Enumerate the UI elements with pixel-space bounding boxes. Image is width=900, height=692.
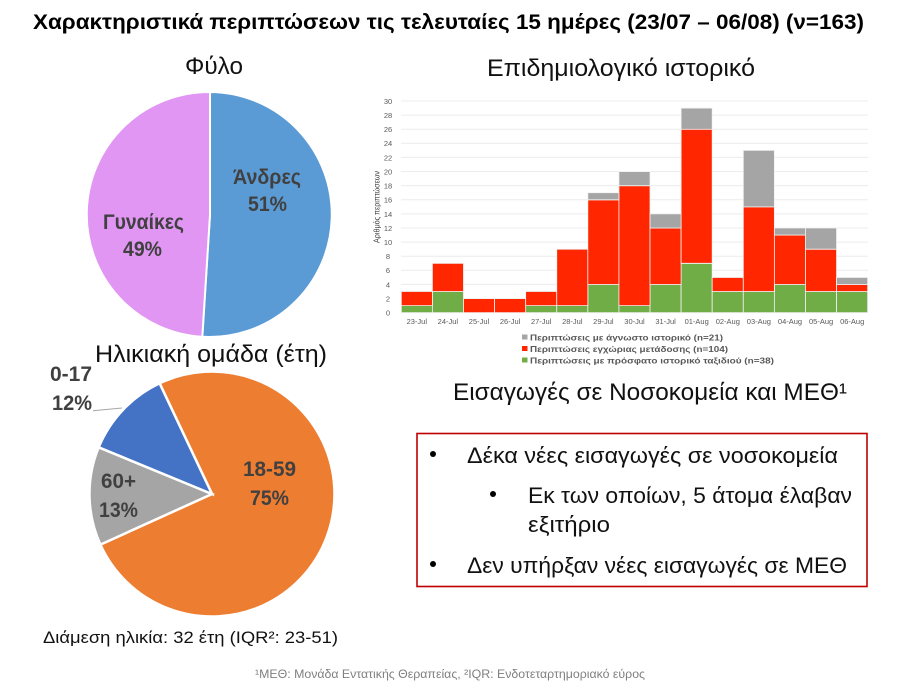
label: men: Άνδρες bbox=[233, 166, 301, 189]
slice: 18-59 bbox=[100, 372, 334, 617]
y axis labels: 4 bbox=[386, 280, 390, 289]
legend: Περιπτώσεις με πρόσφατο ιστορικό ταξιδιού (n=38) bbox=[530, 356, 774, 366]
x axis labels: 30-Jul bbox=[624, 317, 645, 326]
slice: men bbox=[202, 92, 332, 337]
y axis labels: 6 bbox=[386, 266, 390, 275]
label: women: 49% bbox=[123, 238, 162, 261]
label: 0-17: 0-17 bbox=[50, 363, 92, 386]
y axis labels: 22 bbox=[384, 153, 392, 162]
slice: women bbox=[87, 92, 210, 337]
x axis labels: 23-Jul bbox=[407, 317, 427, 326]
y axis labels: 24 bbox=[384, 139, 392, 148]
x axis labels: 05-Aug bbox=[809, 317, 833, 326]
x axis labels: 29-Jul bbox=[593, 317, 614, 326]
slice: 0-17 bbox=[99, 383, 212, 494]
x axis labels: 04-Aug bbox=[778, 317, 802, 326]
y axis labels: 8 bbox=[386, 252, 390, 261]
legend: Περιπτώσεις εγχώριας μετάδοσης (n=104) bbox=[530, 345, 728, 354]
x axis labels: 25-Jul bbox=[469, 317, 490, 326]
sub-bullet: discharged: εξιτήριο bbox=[528, 512, 610, 537]
pie chart: sex bbox=[87, 92, 332, 337]
sub-bullet: discharged bbox=[490, 483, 852, 537]
y axis labels: 14 bbox=[384, 210, 392, 219]
heading: epidemiological history: Επιδημιολογικό ιστορικό bbox=[487, 55, 755, 82]
y axis labels: 30 bbox=[384, 97, 392, 106]
label: 0-17 bbox=[50, 363, 92, 415]
label: 18-59 bbox=[243, 458, 296, 510]
label: 60+: 13% bbox=[99, 499, 138, 522]
y axis labels: 2 bbox=[386, 294, 390, 304]
y axis labels: 0 bbox=[386, 308, 390, 318]
bullet: ICU admissions: Δεν υπήρξαν νέες εισαγωγές σε ΜΕΘ bbox=[467, 553, 847, 578]
x axis labels: 26-Jul bbox=[500, 317, 521, 326]
y axis labels bbox=[384, 97, 392, 318]
x axis labels: 02-Aug bbox=[716, 317, 740, 326]
label: 60+ bbox=[99, 470, 138, 522]
x axis labels: 06-Aug bbox=[840, 317, 864, 326]
heading: admissions: Εισαγωγές σε Νοσοκομεία και ΜΕΘ¹ bbox=[453, 379, 847, 406]
y axis title: Αριθμός περιπτώσεων bbox=[372, 171, 382, 243]
pie chart: age group bbox=[50, 363, 334, 617]
title: Χαρακτηριστικά περιπτώσεων τις τελευταίες 15 ημέρες (23/07 – 06/08) (ν=163) bbox=[33, 11, 864, 34]
y axis labels: 26 bbox=[384, 125, 392, 134]
y axis labels: 18 bbox=[384, 182, 392, 190]
y axis labels: 10 bbox=[384, 238, 392, 247]
label: women: Γυναίκες bbox=[103, 211, 184, 234]
y axis labels: 12 bbox=[384, 224, 392, 233]
bars bbox=[401, 108, 868, 313]
heading: age group: Ηλικιακή ομάδα (έτη) bbox=[95, 341, 327, 368]
bullet: hospital admissions: Δέκα νέες εισαγωγές σε νοσοκομεία bbox=[467, 443, 838, 468]
legend bbox=[522, 334, 774, 366]
label: men bbox=[233, 166, 301, 216]
median age note: Διάμεση ηλικία: 32 έτη (IQR²: 23-51) bbox=[43, 628, 338, 647]
label: women bbox=[103, 211, 184, 261]
sub-bullet: discharged: Εκ των οποίων, 5 άτομα έλαβαν bbox=[528, 483, 852, 508]
x axis labels: 03-Aug bbox=[747, 317, 771, 326]
y axis labels: 16 bbox=[384, 196, 392, 205]
x axis labels: 31-Jul bbox=[655, 317, 676, 326]
leader line bbox=[93, 408, 122, 411]
label: 18-59: 75% bbox=[250, 487, 289, 510]
x axis labels: 28-Jul bbox=[562, 317, 583, 326]
label: 0-17: 12% bbox=[52, 392, 92, 415]
x axis labels: 24-Jul bbox=[438, 317, 458, 326]
heading: sex: Φύλο bbox=[185, 53, 243, 80]
y axis labels: 28 bbox=[384, 111, 392, 120]
footnote: ¹ΜΕΘ: Μονάδα Εντατικής Θεραπείας, ²IQR: Ενδοτεταρτημοριακό εύρος bbox=[255, 667, 645, 681]
x axis labels bbox=[407, 317, 864, 326]
x axis labels: 27-Jul bbox=[531, 317, 552, 326]
y axis labels: 20 bbox=[384, 167, 392, 176]
stacked bar chart bbox=[372, 97, 868, 366]
callout: admissions bbox=[417, 434, 867, 586]
slice: 60+ bbox=[89, 447, 212, 545]
x axis labels: 01-Aug bbox=[685, 317, 709, 326]
label: men: 51% bbox=[248, 193, 287, 216]
label: 60+: 60+ bbox=[101, 470, 136, 493]
legend: Περιπτώσεις με άγνωστο ιστορικό (n=21) bbox=[530, 334, 723, 342]
label: 18-59: 18-59 bbox=[243, 458, 296, 481]
